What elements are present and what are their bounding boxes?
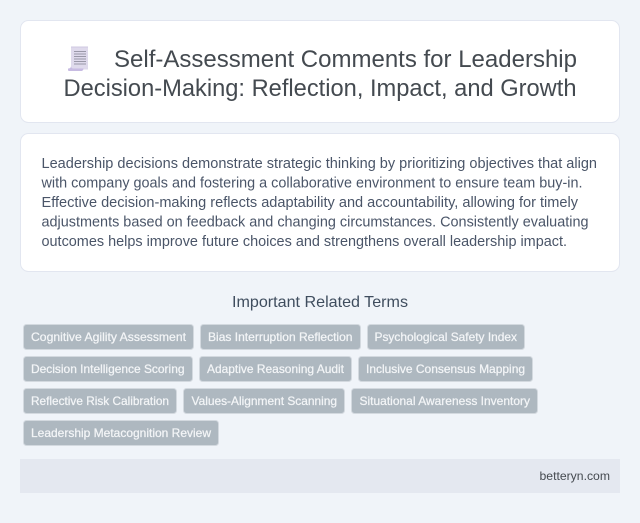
tag: bias interruption reflection: Bias Interruption Reflection (208, 330, 352, 344)
tag: situational awareness inventory: Situational Awareness Inventory (360, 394, 530, 408)
text block: description paragraph (41, 155, 597, 250)
tag: cognitive agility assessment: Cognitive Agility Assessment (31, 330, 187, 344)
title: Self-Assessment Comments for Leadership (114, 46, 577, 73)
tag: reflective risk calibration (24, 388, 176, 414)
text block: description paragraph: adjustments based on feedback and changing circumstances. Consistently evaluating (42, 214, 588, 230)
title (64, 46, 577, 102)
tag: adaptive reasoning audit (200, 356, 352, 382)
tag: decision intelligence scoring: Decision Intelligence Scoring (31, 362, 184, 376)
tag: values-alignment scanning (184, 388, 344, 414)
text block: description paragraph: Effective decision-making reflects adaptability and accountability, allowing for timely (42, 194, 578, 211)
tag: cognitive agility assessment (24, 324, 194, 350)
heading: important related terms: Important Related Terms (232, 294, 408, 311)
title: Decision-Making: Reflection, Impact, and Growth (64, 75, 576, 102)
footer bar (20, 459, 620, 493)
tag: leadership metacognition review (24, 420, 218, 446)
tag: decision intelligence scoring (24, 356, 192, 382)
tag: bias interruption reflection (200, 324, 360, 350)
tag: psychological safety index (368, 324, 524, 350)
panel: title header (20, 20, 620, 122)
tag: reflective risk calibration: Reflective Risk Calibration (31, 394, 169, 408)
tag: psychological safety index: Psychological Safety Index (374, 330, 517, 344)
tag: values-alignment scanning: Values-Alignment Scanning (192, 394, 337, 408)
panel: description (20, 134, 620, 272)
tag: situational awareness inventory (352, 388, 538, 414)
text block: description paragraph: with company goals and fostering a collaborative environment to ensure team buy-in. (41, 174, 582, 192)
tag: inclusive consensus mapping (358, 356, 532, 382)
footer text: site name: betteryn.com (540, 469, 610, 483)
icon: scroll document (68, 47, 88, 71)
text block: description paragraph: outcomes helps improve future choices and strengthens overall leadership impact. (42, 233, 567, 250)
tag list (24, 324, 538, 446)
tag: inclusive consensus mapping: Inclusive Consensus Mapping (366, 362, 525, 376)
tag: adaptive reasoning audit: Adaptive Reasoning Audit (207, 362, 345, 376)
text block: description paragraph: Leadership decisions demonstrate strategic thinking by prioritizing objectives that align (42, 155, 597, 172)
tag: leadership metacognition review: Leadership Metacognition Review (31, 426, 211, 440)
